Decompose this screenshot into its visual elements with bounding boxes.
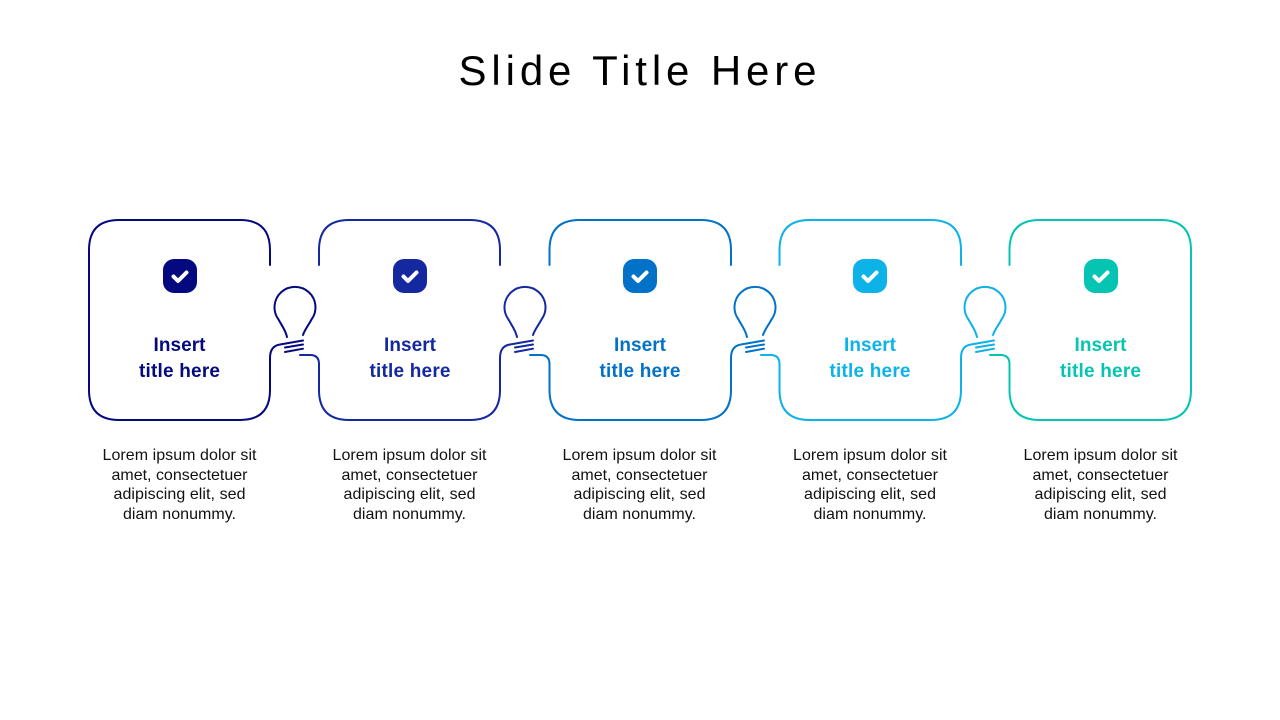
- icon: light bulb 3: [734, 287, 776, 352]
- text block: step 2: Lorem ipsum dolor sit: [332, 447, 487, 464]
- icon: light bulb 4: [964, 287, 1005, 352]
- text block: step 4: amet, consectetuer: [802, 467, 939, 484]
- text block: step 1: diam nonummy.: [123, 506, 236, 523]
- heading: step 5: Insert: [1074, 335, 1127, 356]
- text block: step 5: amet, consectetuer: [1032, 467, 1169, 484]
- panel: step 1: [89, 220, 303, 523]
- text block: step 4: adipiscing elit, sed: [804, 486, 936, 503]
- heading: step 1: Insert: [154, 335, 206, 356]
- icon: check badge 5: [1084, 259, 1118, 293]
- text block: step 4: diam nonummy.: [814, 506, 926, 523]
- title: Slide Title Here: [458, 47, 816, 94]
- icon: check badge 4: [853, 259, 887, 293]
- text block: step 2: adipiscing elit, sed: [344, 486, 476, 503]
- text block: step 2: amet, consectetuer: [342, 467, 478, 484]
- heading: step 4: Insert: [844, 335, 897, 356]
- heading: step 2: title here: [370, 361, 450, 382]
- heading: step 5: title here: [1060, 361, 1141, 382]
- outline: step 3: [530, 220, 764, 420]
- icon: check badge 3: [623, 259, 657, 293]
- outline: step 4: [761, 220, 994, 420]
- text block: step 5: Lorem ipsum dolor sit: [1024, 447, 1178, 464]
- outline: step 2: [300, 220, 533, 420]
- outline: step 1: [89, 220, 303, 420]
- text block: step 3: Lorem ipsum dolor sit: [562, 447, 717, 464]
- text block: step 5: adipiscing elit, sed: [1034, 486, 1166, 503]
- text block: step 3: adipiscing elit, sed: [574, 486, 706, 503]
- heading: step 3: Insert: [614, 335, 667, 356]
- icon: check badge 2: [393, 259, 427, 293]
- text block: step 5: diam nonummy.: [1044, 506, 1157, 523]
- text block: step 1: adipiscing elit, sed: [114, 486, 246, 503]
- panel: step 5: [990, 220, 1191, 523]
- text block: step 3: diam nonummy.: [583, 506, 696, 523]
- text block: step 1: amet, consectetuer: [112, 467, 248, 484]
- panel: step 3: [530, 220, 764, 523]
- text block: step 3: amet, consectetuer: [572, 467, 708, 484]
- text block: step 2: diam nonummy.: [353, 506, 466, 523]
- panel: step 4: [761, 220, 994, 523]
- text block: step 1: Lorem ipsum dolor sit: [102, 447, 257, 464]
- outline: step 5: [990, 220, 1191, 420]
- heading: step 1: title here: [139, 361, 220, 382]
- heading: step 3: title here: [600, 361, 680, 382]
- heading: step 4: title here: [830, 361, 910, 382]
- icon: light bulb 1: [274, 287, 316, 352]
- icon: light bulb 2: [504, 287, 546, 352]
- text block: step 4: Lorem ipsum dolor sit: [793, 447, 948, 464]
- icon: check badge 1: [163, 259, 197, 293]
- heading: step 2: Insert: [384, 335, 437, 356]
- panel: step 2: [300, 220, 533, 523]
